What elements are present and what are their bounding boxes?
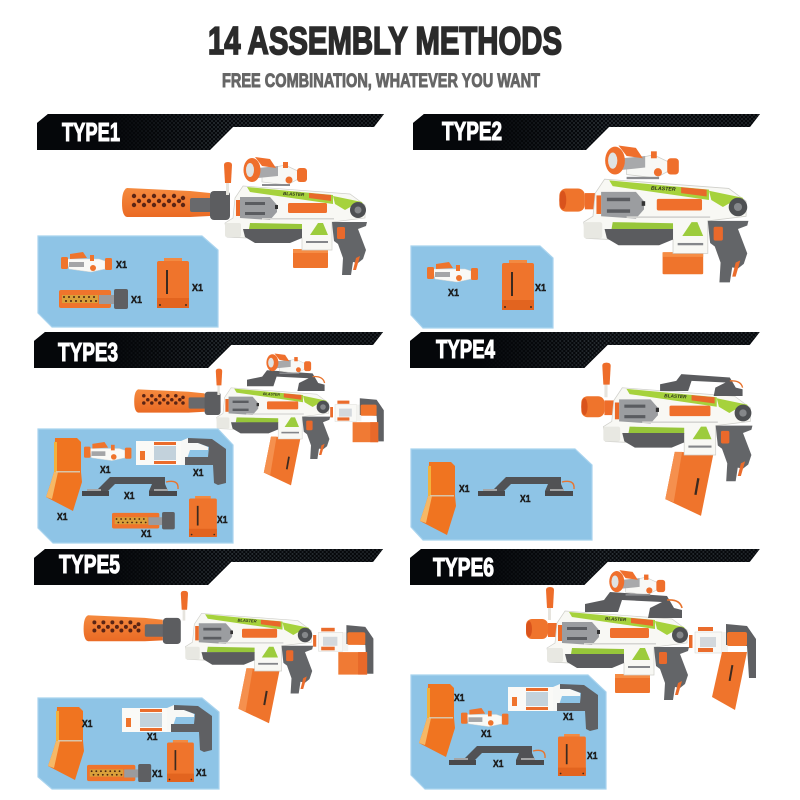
type 6 parts box: X1 — [563, 712, 574, 723]
type 6 parts box: X1 — [587, 751, 598, 762]
type 3 parts box: X1 — [193, 468, 204, 479]
type 2 header — [413, 114, 760, 150]
type 6 header — [410, 549, 760, 585]
type 1 parts box: X1 — [131, 295, 142, 306]
subtitle: FREE COMBINATION, WHATEVER YOU WANT — [222, 71, 540, 92]
type 4 parts box — [411, 449, 592, 540]
type 6 parts box: X1 — [481, 729, 492, 740]
type 4 header: TYPE4 — [436, 334, 495, 364]
type 4 parts box: X1 — [520, 494, 531, 505]
type 2 parts box: X1 — [535, 283, 546, 294]
type 5 blaster — [84, 591, 373, 723]
type 3 parts box: X1 — [57, 512, 68, 523]
type 3 header — [34, 332, 383, 368]
type 6 parts box — [411, 675, 606, 789]
type 1 header — [37, 114, 384, 150]
type 3 header: TYPE3 — [58, 337, 118, 367]
type 5 parts box — [38, 698, 219, 789]
type 3 parts box: X1 — [141, 529, 152, 540]
panel: type 5 — [34, 549, 383, 789]
title: 14 ASSEMBLY METHODS — [208, 20, 562, 63]
type 6 parts box: X1 — [454, 693, 465, 704]
type 1 parts box — [38, 236, 218, 327]
type 6 blaster — [526, 570, 756, 710]
type 1 header: TYPE1 — [62, 117, 120, 147]
type 5 parts box: X1 — [196, 768, 207, 779]
type 1 parts box: X1 — [192, 283, 203, 294]
type 5 parts box: X1 — [147, 732, 158, 743]
type 1 blaster — [122, 157, 367, 275]
type 2 parts box: X1 — [448, 288, 459, 299]
type 2 header: TYPE2 — [442, 116, 502, 146]
type 5 parts box: X1 — [152, 769, 163, 780]
type 3 blaster — [134, 354, 384, 485]
panel: type 2 — [411, 114, 760, 328]
type 4 parts box: X1 — [459, 484, 470, 495]
type 3 parts box — [38, 429, 233, 543]
type 5 parts box: X1 — [82, 719, 93, 730]
panel: type 1 — [37, 114, 384, 327]
type 5 header: TYPE5 — [59, 549, 120, 579]
type 2 parts box — [411, 246, 553, 328]
type 4 blaster — [581, 363, 752, 516]
type 1 parts box: X1 — [116, 260, 127, 271]
type 3 parts box: X1 — [100, 465, 111, 476]
panel: type 6 — [410, 549, 760, 789]
panel: type 4 — [410, 332, 760, 540]
type 4 header — [410, 332, 760, 368]
type 6 header: TYPE6 — [433, 552, 494, 582]
type 3 parts box: X1 — [124, 491, 135, 502]
type 5 header — [34, 549, 383, 585]
type 6 parts box: X1 — [493, 759, 504, 770]
panel: type 3 — [34, 332, 384, 543]
type 3 parts box: X1 — [217, 515, 228, 526]
type 2 blaster — [559, 146, 748, 282]
